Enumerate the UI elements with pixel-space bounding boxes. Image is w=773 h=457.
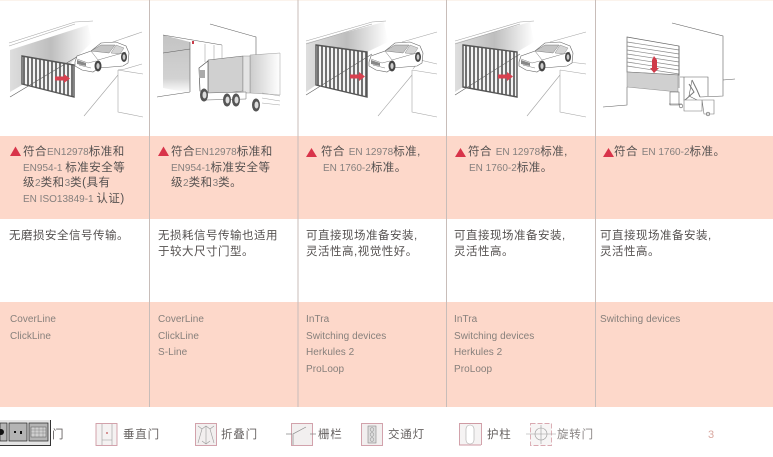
product list: column 3: [306, 314, 386, 375]
illustration: sliding gate with car: [9, 21, 143, 117]
legend label: barrier: 栅栏: [318, 427, 343, 441]
legend label: folding door: 折叠门: [221, 427, 258, 441]
features text: column 1: 无磨损安全信号传输。: [9, 228, 129, 242]
standards text: column 1: EN ISO13849-1: [23, 194, 96, 205]
features text: column 3: [306, 228, 418, 258]
product list: column 2: ClickLine: [158, 331, 199, 342]
icon: bollard: [459, 424, 482, 445]
features text: column 2: 于较大尺寸门型。: [158, 244, 254, 258]
standards text: column 1: 符合: [23, 144, 47, 158]
standards text: column 2: EN12978标准和: [195, 146, 273, 158]
standards text: column 1: 2类和3类(具有: [35, 177, 110, 189]
warning triangle: [455, 148, 466, 157]
product list: column 3: Herkules 2: [306, 347, 355, 358]
features text: column 5: 灵活性高。: [600, 244, 660, 258]
standards text: column 2: 2类和3类。: [183, 177, 242, 189]
standards text: column 2: 级: [171, 176, 183, 189]
warning triangle: [306, 148, 317, 157]
standards text: column 3: 标准。: [371, 161, 407, 174]
warning triangle: [10, 146, 21, 156]
toolbar widget: [0, 420, 51, 446]
features text: column 4: [454, 228, 566, 258]
standards text: column 3: [306, 144, 421, 174]
icon: barrier: [286, 424, 316, 446]
product list: column 4: Herkules 2: [454, 347, 503, 358]
standards text: column 1: EN954-1: [23, 163, 65, 174]
standards text: column 5: [603, 144, 726, 158]
product list: column 1: CoverLine: [10, 314, 56, 325]
illustration: folding door with truck: [157, 24, 280, 112]
standards text: column 2: [158, 144, 273, 189]
product list: column 3: Switching devices: [306, 331, 386, 342]
standards text: column 4: [455, 144, 568, 174]
icon: traffic light: [362, 424, 382, 446]
product list: column 4: [454, 314, 534, 375]
standards text: column 2: 符合: [171, 144, 195, 158]
panel: standards band: [0, 136, 773, 219]
standards text: column 1: 级: [23, 176, 35, 189]
legend label: revolving door: 旋转门: [557, 427, 594, 441]
standards text: column 4: 标准。: [517, 161, 553, 174]
icon: vertical door: [96, 424, 117, 446]
icon: revolving door: [526, 424, 556, 446]
features text: column 4: 灵活性高。: [454, 244, 514, 258]
product list: column 1: ClickLine: [10, 331, 51, 342]
product list: column 1: [10, 314, 56, 342]
product list: column 4: Switching devices: [454, 331, 534, 342]
features text: column 3: 可直接现场准备安装,: [306, 228, 418, 242]
features text: column 5: [600, 228, 712, 258]
standards text: column 3: EN 12978标准,: [349, 146, 421, 158]
illustration: gate with car, variant: [455, 21, 586, 117]
features text: column 2: [158, 228, 278, 258]
page number: 3: [708, 429, 714, 441]
illustration: swing gate with car: [306, 21, 437, 117]
standards text: column 3: 符合: [321, 144, 349, 158]
product list: column 4: InTra: [454, 314, 478, 325]
legend label: door: 门: [52, 427, 64, 441]
product list: column 3: ProLoop: [306, 364, 345, 375]
icon: folding door: [196, 424, 216, 446]
product list: column 3: InTra: [306, 314, 330, 325]
product list: column 2: [158, 314, 204, 358]
standards text: column 5: EN 1760-2标准。: [642, 146, 726, 158]
product list: column 4: ProLoop: [454, 364, 493, 375]
features text: column 4: 可直接现场准备安装,: [454, 228, 566, 242]
features text: column 2: 无损耗信号传输也适用: [158, 228, 278, 242]
standards text: column 1: [10, 144, 125, 205]
standards text: column 1: 标准安全等: [65, 160, 125, 174]
legend label: vertical door: 垂直门: [123, 427, 160, 441]
legend label: traffic light: 交通灯: [388, 427, 425, 441]
product list: column 2: S-Line: [158, 347, 188, 358]
standards text: column 4: EN 1760-2: [469, 163, 517, 174]
features text: column 3: 灵活性高,视觉性好。: [306, 244, 418, 258]
standards text: column 4: EN 12978标准,: [496, 146, 568, 158]
standards text: column 5: 符合: [614, 144, 642, 158]
standards text: column 2: EN954-1: [171, 163, 211, 174]
standards text: column 2: 标准安全等: [210, 160, 270, 174]
illustration: roll-up door with forklift: [603, 23, 735, 116]
standards text: column 4: 符合: [468, 144, 496, 158]
warning triangle: [603, 148, 614, 157]
features text: column 5: 可直接现场准备安装,: [600, 228, 712, 242]
warning triangle: [158, 146, 169, 156]
panel: product lines band: [0, 302, 773, 407]
legend label: bollard: 护柱: [487, 427, 512, 441]
product list: column 5: Switching devices: [600, 314, 680, 325]
standards text: column 1: 认证): [96, 192, 125, 205]
product list: column 2: CoverLine: [158, 314, 204, 325]
standards text: column 3: EN 1760-2: [323, 163, 371, 174]
standards text: column 1: EN12978标准和: [47, 146, 125, 158]
